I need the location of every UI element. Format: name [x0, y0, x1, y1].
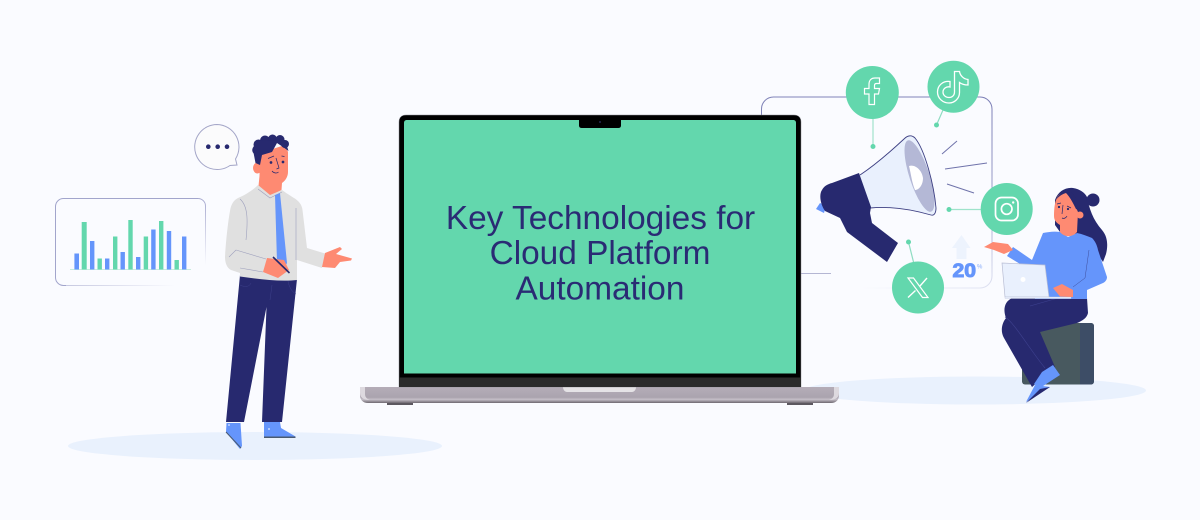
small laptop: [1002, 263, 1071, 298]
face details: [268, 156, 284, 173]
fringe: [1056, 191, 1081, 211]
illustration: laptop: [360, 115, 839, 405]
frame stub line: [800, 272, 831, 274]
pocket lines: [240, 281, 296, 300]
connector: facebook: [870, 116, 876, 149]
tie: [275, 193, 287, 273]
trousers: [226, 275, 297, 422]
illustration: woman with laptop: [984, 188, 1107, 403]
sweater: [1007, 232, 1107, 299]
icon: megaphone: [816, 136, 987, 262]
speech bubble: [195, 124, 239, 169]
ear: [1076, 212, 1084, 218]
handle: [820, 173, 898, 262]
connector: tiktok: [934, 110, 943, 128]
neck and face: [258, 145, 288, 196]
connector: x: [906, 240, 914, 264]
connector: instagram: [946, 207, 983, 212]
stool: [1022, 323, 1094, 384]
pointing hand: [322, 247, 352, 268]
sleeve seam: [1073, 250, 1089, 287]
nub: [816, 203, 826, 213]
icon: up arrow with 20 percent: %: [977, 264, 983, 270]
hand on laptop: [1053, 284, 1073, 297]
icon: facebook: [846, 66, 899, 119]
panel: social media frame: [762, 97, 992, 288]
leg seams: [1005, 296, 1065, 368]
illustration: man presenting: [225, 134, 352, 449]
laptop base: [360, 387, 839, 405]
title: Key Technologies for: [446, 200, 755, 237]
camera: [599, 121, 601, 123]
icon: up arrow with 20 percent: 20: [952, 260, 976, 282]
sound rays: [942, 141, 987, 193]
floor shadow: woman: [804, 376, 1146, 404]
ear: [253, 162, 262, 174]
megaphone horn: [860, 136, 936, 215]
shirt folds: [229, 189, 296, 272]
laptop bezel: [399, 115, 801, 387]
icon: instagram: [981, 183, 1033, 235]
panel: bar chart card: [56, 198, 206, 286]
icon: up arrow with 20 percent: [952, 235, 983, 282]
chin: [399, 378, 801, 387]
legs: [1002, 298, 1088, 387]
laptop screen: [404, 120, 796, 374]
horn inner: [898, 137, 941, 215]
neck and face: [1054, 192, 1078, 236]
pen: [273, 257, 290, 273]
back hair: [1055, 188, 1107, 262]
title: [446, 200, 755, 308]
face details: [1057, 203, 1071, 218]
hair bun: [1086, 194, 1100, 206]
hand holding pen: [263, 258, 289, 278]
horn outline: [860, 136, 936, 215]
icon: x: [892, 262, 944, 314]
notch: [579, 119, 621, 128]
shirt: [225, 185, 325, 281]
horn highlight: [909, 166, 923, 190]
shoes: [226, 422, 296, 449]
raised hand: [984, 242, 1013, 254]
floor shadow: man: [68, 432, 442, 460]
bar chart: [70, 220, 191, 270]
title: Automation: [516, 270, 684, 308]
icon: tiktok: [928, 61, 980, 113]
title: Cloud Platform: [490, 235, 710, 272]
hair: [252, 134, 289, 165]
shoes: [1026, 365, 1060, 403]
